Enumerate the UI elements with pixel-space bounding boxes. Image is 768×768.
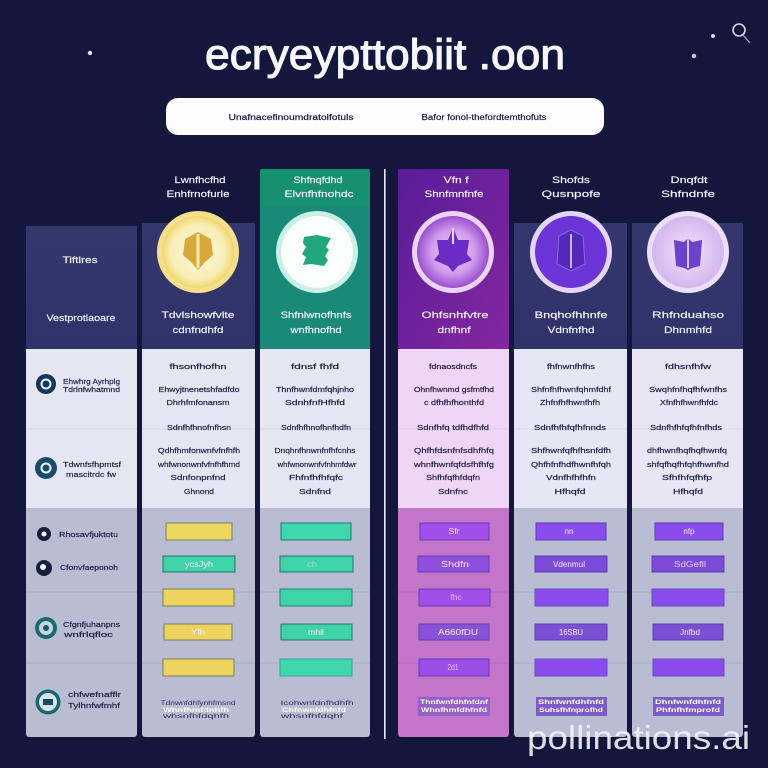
feature text: Sdnfhfhfqfhfnfhds (650, 423, 722, 432)
feature text: Thnfhwnfdmfqhjnho (276, 385, 354, 394)
title: ecryeypttobiit .oon (205, 31, 565, 79)
feature text: whfwnonwnfvfnhmfdwr (276, 460, 357, 469)
rating bars (652, 523, 724, 716)
decorative stars and magnifier icon (88, 24, 750, 58)
footer note: Whnfhmfdnhfh (163, 707, 229, 714)
row 3 label: Rhosavfjuktotu (59, 530, 118, 539)
rating bars (535, 523, 608, 716)
row 2 label: mascitrdc fw (66, 470, 117, 479)
icon: green coin (276, 211, 358, 293)
row 1 label: Ehwhrg Ayrhplg (63, 377, 120, 386)
row 6 label: chfwefnafflr (68, 690, 122, 699)
feature text: Ehwyjtnenetshfadfdo (158, 385, 240, 394)
feature text: Dnqhnfhnwnfnfhfcnhs (274, 446, 356, 455)
rating bars: A660fDU (438, 628, 478, 637)
panel: column 3 purple (398, 169, 509, 737)
footer badge (536, 697, 607, 716)
row 5 label (62, 620, 120, 639)
watermark: pollinations.ai (527, 719, 750, 756)
feature text: SdnhfnfHfhfd (285, 398, 345, 407)
icon: row 6 (36, 690, 60, 714)
column heading (542, 175, 600, 199)
feature text: fdnaosdncfs (429, 362, 477, 371)
rating bars: Yfh (191, 628, 205, 637)
rating bars: Vdenmul (553, 560, 585, 569)
plan label (652, 310, 724, 335)
footer badge: Dhnfwnfdhfnfd (655, 699, 721, 706)
footer badge: Thnfwnfdhfnfdnf (420, 699, 489, 706)
plan label: Bnqhofhhnfe (534, 310, 608, 320)
feature text: Hfhqfd (673, 487, 703, 496)
feature text: Sdnfnc (438, 487, 468, 496)
panel: column 5 lilac (632, 175, 743, 737)
plan label (280, 310, 352, 335)
feature text: Sdnfhfhnofnfhsn (167, 423, 231, 432)
column heading (284, 175, 354, 199)
plan label: dnfhnf (438, 325, 471, 335)
icon: purple coin (412, 211, 494, 293)
feature text: Sdnfonpnfnd (170, 473, 226, 482)
plan label (534, 310, 608, 335)
icon: gold coin (157, 211, 239, 293)
plan label: Tdvlshowfvlte (162, 310, 234, 320)
column heading: Lwnfhcfhd (174, 175, 226, 185)
feature text: Xfnfhfhwnfhfdc (660, 398, 718, 407)
column heading: Shfndnfe (661, 189, 715, 199)
footer badge: Whnfhmfdhfnfd (421, 707, 487, 714)
row 1 label: Tdrlnfwhatmnd (63, 385, 120, 394)
plan label (162, 310, 234, 335)
feature text: Qdhfhmfonwnfvfnfhfh (158, 446, 240, 455)
feature text: Qhfhfdsnfnfsdhfhfq (414, 446, 494, 455)
feature text: dhfhwnfhqfhqfhwnfq (647, 446, 727, 455)
feature text: Sdnfhfq tdfhdfhfd (417, 423, 489, 432)
feature text (274, 362, 357, 496)
feature text: Sdnfnd (299, 487, 331, 496)
feature text (157, 362, 240, 496)
rating bars: 2d1 (448, 663, 459, 672)
rating bars: Jnfbd (680, 628, 700, 637)
column heading (166, 175, 230, 199)
icon: row 2 (35, 457, 57, 479)
column heading (424, 175, 484, 199)
feature text: Shfhwnfqfhfhsnfdfh (531, 446, 611, 455)
feature text: whnfhwnfqfdsfhfhfg (413, 460, 494, 469)
feature text (413, 362, 494, 496)
feature text: Sdnfhfhfqfhfnnds (534, 423, 606, 432)
header labels: Tiftlres (62, 255, 98, 265)
column heading: Shofds (552, 175, 591, 185)
rating bars: ch (307, 560, 317, 569)
subtitle pill: Unafnacefinoumdratolfotuls (228, 113, 354, 122)
feature text: Ghnond (184, 487, 214, 496)
feature text: whfwnonwnfvfnfhfhmd (157, 460, 240, 469)
row 5 label: Cfgnfjuhanpns (63, 620, 120, 629)
feature text: Fhfnfhfhfqfc (289, 473, 343, 482)
row 6 label: Tylhnfwfmhf (68, 701, 121, 710)
feature text: Vdnfhfhfhfn (546, 473, 596, 482)
panel: feature labels column (26, 226, 137, 737)
plan label: wnfhnofhd (289, 325, 342, 335)
plan label: Ohfsnhfvtre (422, 310, 488, 320)
rating bars: mhil (308, 628, 324, 637)
feature text: Swqhfnfhqfhfwnfhs (649, 385, 727, 394)
rating bars: SdGefll (674, 560, 706, 569)
footer badge: Phfnfhfmprofd (656, 707, 720, 714)
feature text: fhsonfhofhn (170, 362, 226, 371)
footer badge: Shnfwnfdhfnfd (538, 699, 604, 706)
feature text: Shfhfqfhfdqfn (426, 473, 480, 482)
rating bars: ycsJyh (185, 560, 213, 569)
subtitle pill (166, 98, 604, 135)
feature text: Sdnfhfhnofhnfhdfn (281, 423, 351, 432)
feature text: fdnsf fhfd (291, 362, 339, 371)
column heading: Dnqfdt (670, 175, 708, 185)
feature text: Shfnfhfhwnfqhmfdhf (531, 385, 612, 394)
feature text (647, 362, 729, 496)
feature text: Qhfhfnfhdfhwnfhfqh (531, 460, 611, 469)
rating bars: Sfr (448, 527, 460, 536)
icon: row 5 (35, 617, 57, 639)
column heading (661, 175, 715, 199)
rating bars: nn (564, 527, 574, 536)
feature text: Zhfnfhfhwnfhfh (540, 398, 600, 407)
feature text: shfqfhqfhfqhfhwnfhd (647, 460, 729, 469)
header labels (46, 255, 116, 323)
feature text: fdhsnfhfw (665, 362, 712, 371)
column heading: Enhfrnofurle (166, 189, 230, 199)
plan label (422, 310, 488, 335)
footer note: Icohwnfdnfhdhfh (280, 700, 354, 707)
footer badge: Suhsfhfnprofhd (539, 707, 603, 714)
plan label: Dhnmhfd (664, 325, 712, 335)
footer note: Tdnwnfdhfynhfmsnd (160, 700, 236, 707)
feature text: c dfhfhfhonthfd (424, 398, 484, 407)
column heading: Shfnqfdhd (294, 175, 342, 185)
rating bars: Shdfn (441, 560, 469, 569)
plan label: Vdnfnfhd (548, 325, 594, 335)
panel: column 2 green (260, 169, 370, 737)
row 1 label (63, 377, 120, 394)
feature text: Hfhqfd (554, 487, 586, 496)
plan label: Shfnlwnofhnfs (280, 310, 352, 320)
footer note: Chfnwnfdhfnfd (282, 707, 346, 714)
icon: row 3 (37, 527, 51, 541)
footer note (279, 700, 354, 720)
footer note: whsnfhfdqhf (279, 713, 343, 720)
column heading: Shnfmnfnfe (424, 189, 484, 199)
rating bars (163, 523, 235, 676)
feature text (531, 362, 612, 496)
footer note (160, 700, 236, 720)
footer badge (418, 697, 490, 716)
plan label: Rhfnduahso (652, 310, 724, 320)
footer note: whsnfhfdqhfh (161, 713, 230, 720)
subtitle pill: Bafor fonol-thefordtemthofuts (422, 113, 546, 122)
divider (384, 169, 386, 739)
row 5 label: wnfrlqfloc (62, 630, 113, 639)
header labels: Vestprotlaoare (46, 313, 116, 323)
rating bars: fhc (450, 593, 462, 602)
feature text: Ohnfhwnmd gsfmtfhd (414, 385, 494, 394)
rating bars (280, 523, 353, 676)
row 2 label (63, 460, 122, 479)
icon: row 4 (36, 560, 52, 576)
feature text: Dhrhfmfonansm (166, 398, 230, 407)
column heading: Vfn f (444, 175, 469, 185)
column heading: Qusnpofe (542, 189, 600, 199)
column heading: Elvnfhfnohdc (284, 189, 354, 199)
footer badge (653, 697, 724, 716)
icon: violet coin (530, 211, 612, 293)
rating bars: 16SBU (559, 628, 583, 637)
icon: lilac coin (647, 211, 729, 293)
rating bars: nfp (684, 527, 695, 536)
icon: row 1 (36, 374, 56, 394)
plan label: cdnfndhfd (172, 325, 224, 335)
row 4 label: Cfonvfaeponoh (60, 563, 118, 572)
row 2 label: Tdwnfsfhpmtsf (63, 460, 122, 469)
feature text: fhfnwnfhfhs (547, 362, 595, 371)
row 6 label (68, 690, 122, 710)
feature text: Sfhfhfqfhfp (662, 473, 712, 482)
panel: column 1 gold (142, 175, 255, 737)
panel: column 4 violet (514, 175, 627, 737)
rating bars (418, 523, 490, 716)
